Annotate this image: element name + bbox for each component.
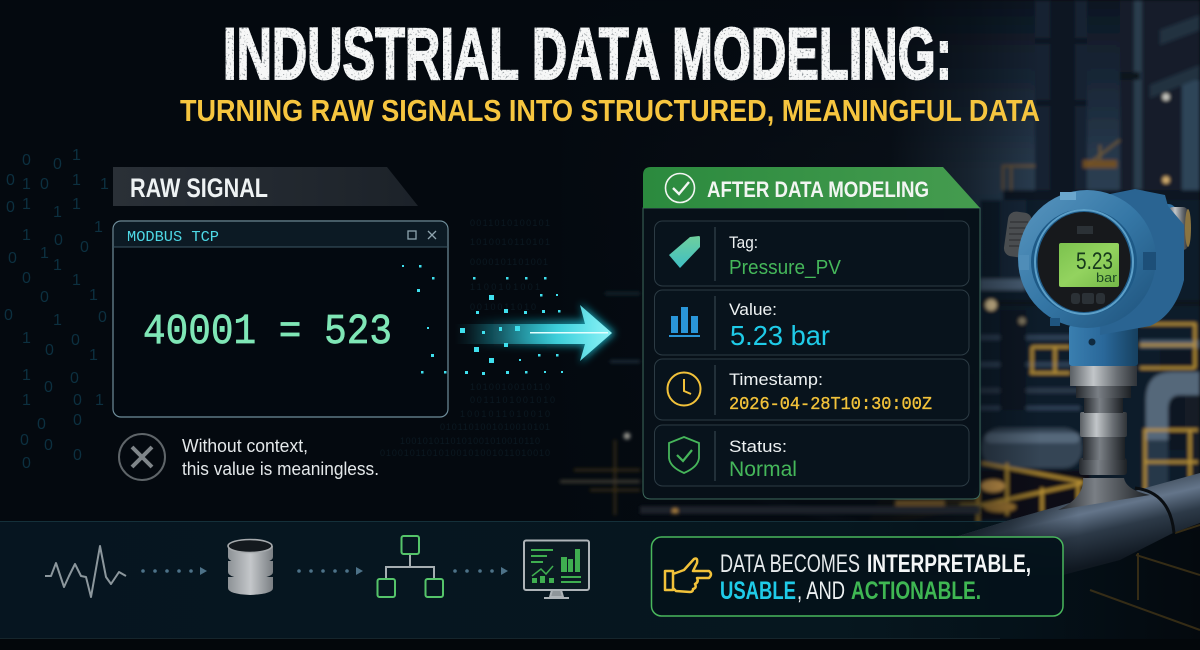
binary rain: 1	[89, 287, 98, 304]
data particles	[402, 265, 563, 375]
binary rain: 1	[72, 196, 81, 213]
warning: without context: Without context,	[182, 436, 308, 456]
binary rain: 0	[22, 455, 31, 472]
row: tag: Pressure_PV	[729, 257, 842, 279]
row: value: 5.23 bar	[730, 320, 830, 351]
binary rain: 1	[22, 176, 31, 193]
faint binary block: 0011010100101	[470, 218, 550, 228]
binary rain: 0	[37, 416, 46, 433]
bottom strip	[0, 639, 1200, 650]
callout: data becomes interpretable	[652, 537, 1063, 616]
binary rain: 1	[22, 367, 31, 384]
binary rain: 0	[73, 392, 82, 409]
row: status: Status:	[729, 437, 787, 456]
towers	[1035, 0, 1087, 200]
binary rain: 0	[44, 437, 53, 454]
binary rain: 0	[6, 199, 15, 216]
heading: raw signal	[113, 167, 418, 206]
row: tag	[654, 221, 969, 286]
binary rain: 1	[40, 245, 49, 262]
faint binary block: 1010010110101	[470, 237, 550, 247]
faint binary block: 1001010110101001010010110	[400, 436, 540, 446]
panel heading: AFTER DATA MODELING	[707, 177, 929, 202]
binary rain: 1	[95, 392, 104, 409]
stem and fittings	[1058, 366, 1150, 510]
arrow: raw to modeled	[402, 265, 615, 375]
panel: after data modeling	[643, 167, 980, 499]
binary rain: 1	[53, 204, 62, 221]
arrow: dotted two	[297, 567, 363, 575]
binary rain: 0	[73, 447, 82, 464]
binary rain: 0	[40, 289, 49, 306]
binary rain: 0	[45, 342, 54, 359]
binary rain: 0	[20, 432, 29, 449]
icon: database	[228, 540, 273, 595]
below panel ground	[620, 499, 980, 529]
side conduit knobs	[1003, 204, 1191, 258]
dim railings at footer right	[1090, 525, 1200, 630]
subtitle: TURNING RAW SIGNALS INTO STRUCTURED, MEANINGFUL DATA	[180, 93, 1040, 128]
callout: data becomes interpretable: USABLE	[720, 577, 796, 605]
device buttons	[1071, 226, 1105, 304]
binary rain: 0	[71, 332, 80, 349]
blue neck	[1069, 325, 1138, 366]
binary rain: 0	[53, 156, 62, 173]
binary rain: 0	[22, 270, 31, 287]
row: status: Normal	[729, 458, 797, 481]
binary rain: 1	[22, 392, 31, 409]
background: blurred industrial plant	[560, 0, 1200, 530]
warning: without context: this value is meaningless.	[182, 459, 379, 479]
binary rain: 0	[6, 172, 15, 189]
lcd screen	[1059, 243, 1119, 287]
binary rain: 0	[80, 239, 89, 256]
icon: signal wave	[45, 546, 126, 597]
binary rain: 1	[72, 147, 81, 164]
warning: without context	[119, 434, 379, 480]
binary rain	[4, 147, 109, 472]
mid-ground structure	[980, 200, 1200, 500]
plant lights	[986, 274, 1042, 324]
icon: check circle	[666, 174, 694, 202]
binary rain: 1	[72, 172, 81, 189]
faint binary block: 1100101001	[470, 282, 540, 292]
arrow: dotted three	[453, 567, 508, 575]
row: timestamp: Timestamp:	[729, 370, 823, 389]
row: tag: Tag:	[729, 233, 758, 252]
panel: modbus window	[113, 221, 448, 417]
row: value	[654, 290, 969, 355]
binary rain: 0	[8, 250, 17, 267]
binary rain: 0	[22, 152, 31, 169]
window controls	[408, 231, 436, 239]
faint binary block: 0101101001010010101	[440, 422, 550, 432]
lcd screen: 5.23	[1076, 248, 1113, 275]
panel header	[643, 167, 980, 208]
binary rain: 1	[22, 330, 31, 347]
icon: dashboard monitor	[524, 540, 589, 598]
row: value: Value:	[729, 300, 777, 319]
binary rain: 0	[98, 309, 107, 326]
binary rain: 0	[70, 370, 79, 387]
binary rain: 1	[53, 257, 62, 274]
binary rain: 1	[94, 219, 103, 236]
railings	[960, 324, 1198, 525]
icon: hierarchy	[378, 536, 443, 597]
background: left shading over plant	[540, 0, 1040, 530]
faint binary block: 0010011010	[470, 302, 536, 312]
device: pressure transmitter	[1003, 189, 1191, 510]
main process pipe	[930, 473, 1200, 575]
housing front ring	[1018, 190, 1156, 328]
icon: tag	[669, 236, 700, 268]
faint binary block: 1001011010010	[460, 409, 550, 419]
footer band	[0, 521, 1200, 639]
background pipes	[982, 428, 1082, 468]
binary rain: 0	[40, 176, 49, 193]
display face	[1038, 212, 1130, 312]
binary rain: 1	[100, 176, 109, 193]
icon: shield	[669, 437, 699, 473]
binary rain: 1	[22, 196, 31, 213]
binary rain: 0	[73, 412, 82, 429]
dim plant detail beside panel	[560, 292, 980, 515]
faint binary block: 01001011010100101001011010010	[380, 448, 550, 458]
binary rain: 0	[4, 307, 13, 324]
callout: data becomes interpretable: , AND	[797, 577, 845, 605]
row: timestamp: 2026-04-28T10:30:00Z	[729, 395, 932, 415]
faint binary block: 1010010010110	[470, 382, 550, 392]
binary rain: 1	[72, 272, 81, 289]
faint binary block: 0000101101001	[470, 257, 548, 267]
callout text: DATA BECOMES	[720, 550, 860, 578]
callout: data becomes interpretable: INTERPRETABLE,	[867, 550, 1031, 578]
binary rain: 1	[53, 312, 62, 329]
arrow: dotted one	[141, 567, 207, 575]
callout: data becomes interpretable: ACTIONABLE.	[851, 577, 981, 605]
window label: MODBUS TCP	[127, 229, 219, 246]
binary rain: 0	[54, 232, 63, 249]
lcd screen: bar	[1096, 270, 1118, 285]
binary rain: 0	[44, 379, 53, 396]
icon: x circle	[119, 434, 165, 480]
binary rain: 1	[89, 347, 98, 364]
icon: clock	[668, 372, 700, 406]
icon: pointing hand	[665, 558, 711, 592]
process flow	[45, 536, 589, 598]
row: timestamp	[654, 359, 969, 420]
housing rear body	[1100, 189, 1184, 335]
faint binary block: 0011101001010	[470, 395, 555, 405]
faint binary block	[380, 218, 555, 458]
heading: raw signal: RAW SIGNAL	[130, 173, 268, 203]
icon: bars	[669, 307, 700, 337]
binary rain: 1	[22, 227, 31, 244]
register reading: 40001 = 523	[143, 307, 392, 356]
row: status	[654, 425, 969, 486]
